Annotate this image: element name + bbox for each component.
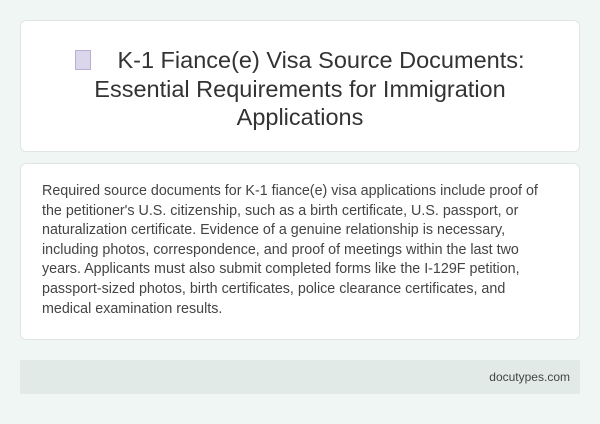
- icon: document: [75, 50, 91, 70]
- footer bar: [20, 360, 580, 394]
- title card: [20, 20, 580, 152]
- description text: Required source documents for K-1 fiance(e) visa applications include proof of the petitioner's U.S. citizenship, such as a birth certificate, U.S. passport, or naturalization certificate. Evidence of a genuine relationship is necessary, including photos, correspondence, and proof of meetings within the last two years. Applicants must also submit completed forms like the I-129F petition, passport-sized photos, birth certificates, police clearance certificates, and medical examination results.: [42, 183, 538, 317]
- title: K-1 Fiance(e) Visa Source Documents: Essential Requirements for Immigration Applications: [94, 47, 525, 130]
- description card: [20, 163, 580, 340]
- footer text: docutypes.com: [489, 370, 570, 384]
